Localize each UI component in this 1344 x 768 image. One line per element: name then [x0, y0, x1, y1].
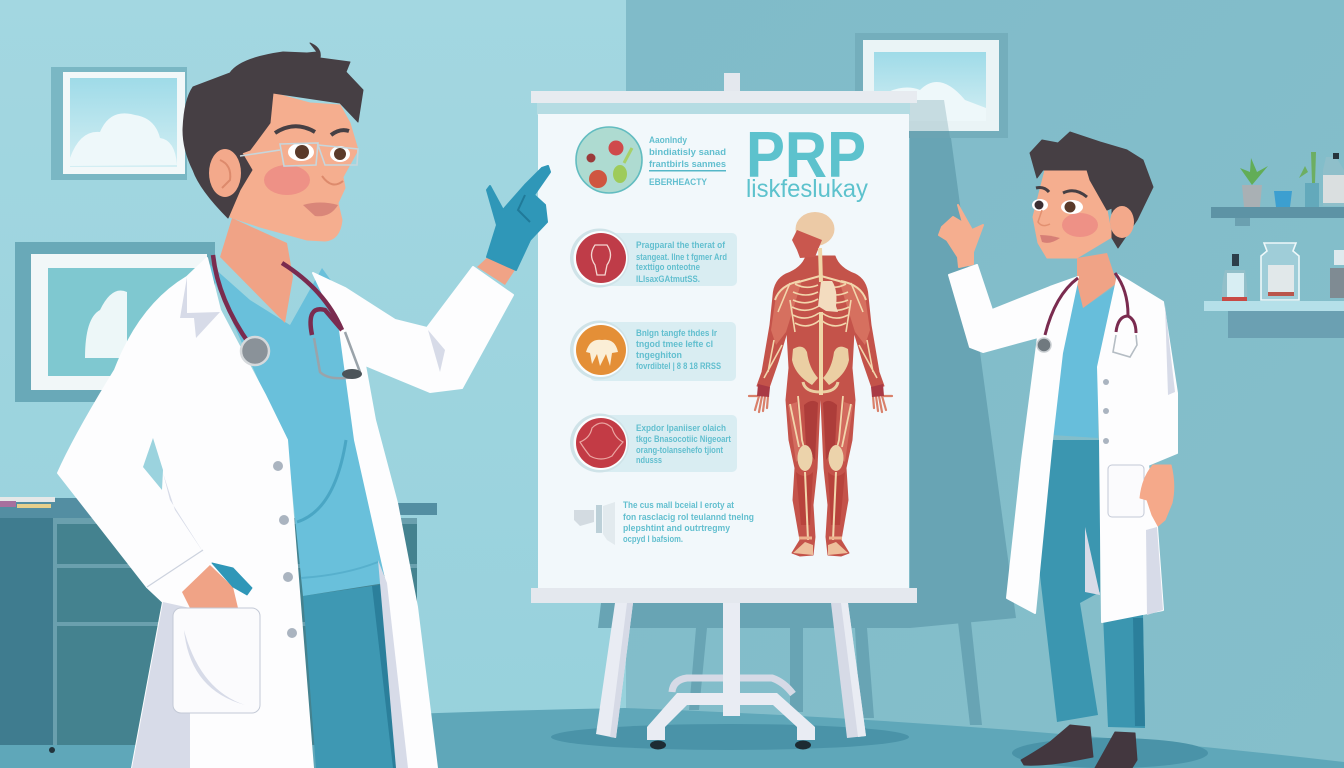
sleeve cuff seam [147, 550, 203, 587]
scrub hem line [301, 562, 378, 578]
poster row 1: Pragparal the therat of [636, 240, 726, 251]
poster row 3 [570, 414, 737, 472]
poster knob [724, 73, 740, 92]
desk [0, 498, 437, 753]
poster top bar [531, 91, 917, 103]
papers on desk [0, 497, 55, 508]
poster row 4: device icon and text: plepshtint and outrtregmy [623, 523, 731, 534]
poster row 4: device icon and text: fon rasclacig rol teulannd tnelng [623, 512, 754, 523]
buttons [273, 461, 297, 638]
poster shadow on wall [598, 138, 1016, 725]
head [183, 43, 363, 241]
poster row 2: fovrdibtel | 8 8 18 RRSS [636, 361, 721, 372]
trousers [303, 584, 408, 768]
coat [949, 265, 1078, 613]
coat right panel and sleeve [1098, 275, 1177, 622]
ear [1110, 206, 1134, 238]
coat shading [1146, 527, 1163, 615]
poster intro text: frantbirls sanmes [649, 159, 726, 170]
poster row 2: tngod tmee Iefte cl [636, 339, 713, 350]
specimen jar [1261, 243, 1299, 300]
plant [1240, 158, 1268, 185]
hair [1030, 132, 1153, 248]
eyes [288, 143, 350, 162]
top shelf [1211, 152, 1344, 226]
floor [0, 708, 1344, 768]
pocket [173, 608, 260, 713]
right shoe [1095, 732, 1137, 768]
blush [264, 165, 310, 195]
buttons [1103, 379, 1109, 444]
trousers: rear leg [1039, 440, 1100, 722]
nose [1038, 210, 1050, 226]
face muscle of anatomy figure [792, 230, 822, 258]
neck [1077, 253, 1117, 308]
poster intro text: bindiatisly sanad [649, 147, 726, 158]
poster row 3: Expdor lpaniiser olaich [636, 423, 726, 434]
poster row 4: device icon and text [574, 500, 754, 545]
eyes [1032, 199, 1083, 214]
head [1030, 132, 1153, 258]
stethoscope ear tips [342, 369, 362, 379]
poster row 1: stangeat. Ilne t fgmer Ard [636, 252, 727, 263]
mouth [303, 202, 338, 216]
right wall [626, 0, 1344, 768]
trouser shade [372, 584, 408, 768]
medicine bottle [1323, 153, 1344, 206]
glove cuff in pocket [212, 563, 252, 595]
left doctor [58, 43, 550, 768]
stethoscope chest piece [1037, 338, 1051, 352]
poster row 4: device icon and text: ocpyd I bafsiom. [623, 534, 683, 545]
stethoscope chest piece [241, 337, 269, 365]
anatomy figure [749, 212, 892, 556]
analyzer device [1330, 250, 1344, 298]
poster row 2: Bnlgn tangfe thdes Ir [636, 328, 717, 339]
eyebrows [1036, 188, 1087, 197]
scrub fold [297, 440, 346, 522]
poster intro text: EBERHEACTY [649, 177, 708, 188]
poster row 2: tngeghiton [636, 350, 682, 361]
eyebrows [275, 126, 349, 135]
head of anatomy figure [796, 212, 834, 246]
stethoscope [1045, 273, 1137, 357]
poster row 2 [570, 320, 736, 381]
stethoscope [213, 255, 360, 378]
wrist [477, 255, 515, 285]
face [1033, 170, 1112, 258]
hair [183, 43, 363, 218]
picture frame: top right [855, 33, 1008, 138]
blush [1062, 213, 1098, 237]
sleeve shading [1165, 305, 1175, 395]
glove finger fold [518, 195, 530, 222]
poster row 3: ndusss [636, 455, 662, 466]
coat shading [132, 277, 445, 768]
poster band [537, 103, 910, 115]
face [217, 93, 358, 241]
trouser shade [1133, 618, 1145, 726]
poster row 4: device icon and text: The cus mall bceial I eroty at [623, 500, 735, 511]
pocket crease [184, 630, 245, 705]
easel stand [596, 603, 866, 750]
poster board [538, 114, 909, 589]
nose [322, 176, 343, 185]
scrub top [1052, 283, 1120, 438]
blue cup [1274, 191, 1292, 207]
scrub top [205, 260, 385, 596]
raised hand [939, 205, 983, 267]
plant pot [1242, 185, 1262, 207]
poster intro text: Aaonlndy [649, 135, 688, 146]
poster subtitle: liskfeslukay [746, 175, 868, 203]
glasses [240, 143, 358, 166]
coat right side and arm [313, 267, 513, 768]
lowered hand [1140, 465, 1174, 526]
floor shadow under easel [551, 724, 909, 750]
poster row 3: orang-tolansehefo tjiont [636, 445, 724, 456]
poster row 1 [570, 228, 737, 288]
spine [820, 248, 821, 395]
poster intro icon: food circle [576, 127, 642, 193]
mouth [1040, 235, 1060, 243]
poster title: PRP: PRP [746, 118, 866, 191]
poster row 1: texttigo onteotne [636, 262, 700, 273]
neck [220, 218, 293, 323]
left shoe [1021, 725, 1093, 765]
dropper bottle [1222, 254, 1247, 301]
pocket [1108, 465, 1144, 517]
picture frame: top left [51, 67, 187, 180]
trousers: front leg [1103, 615, 1145, 728]
picture frame: behind doctor [15, 242, 215, 402]
poster intro text [649, 135, 726, 188]
poster row 3: tkgc Bnasocotiic Nigeoart [636, 434, 732, 445]
lower shelf [1204, 243, 1344, 338]
left wall [0, 0, 626, 768]
poster row 1: ILIsaxGAtmutSS. [636, 274, 700, 285]
vase with stems [1299, 152, 1319, 207]
lab coat [58, 258, 313, 768]
sternum plate [818, 281, 838, 312]
blue glove pointing [487, 166, 550, 270]
poster bottom bar [531, 588, 917, 603]
hand in pocket [182, 565, 238, 608]
inner ear [220, 160, 230, 188]
coat lining [1085, 527, 1100, 595]
gap between arm and coat [143, 438, 163, 490]
right doctor [939, 132, 1177, 768]
floor shadow under right doctor [1012, 738, 1208, 768]
ear [209, 149, 241, 197]
